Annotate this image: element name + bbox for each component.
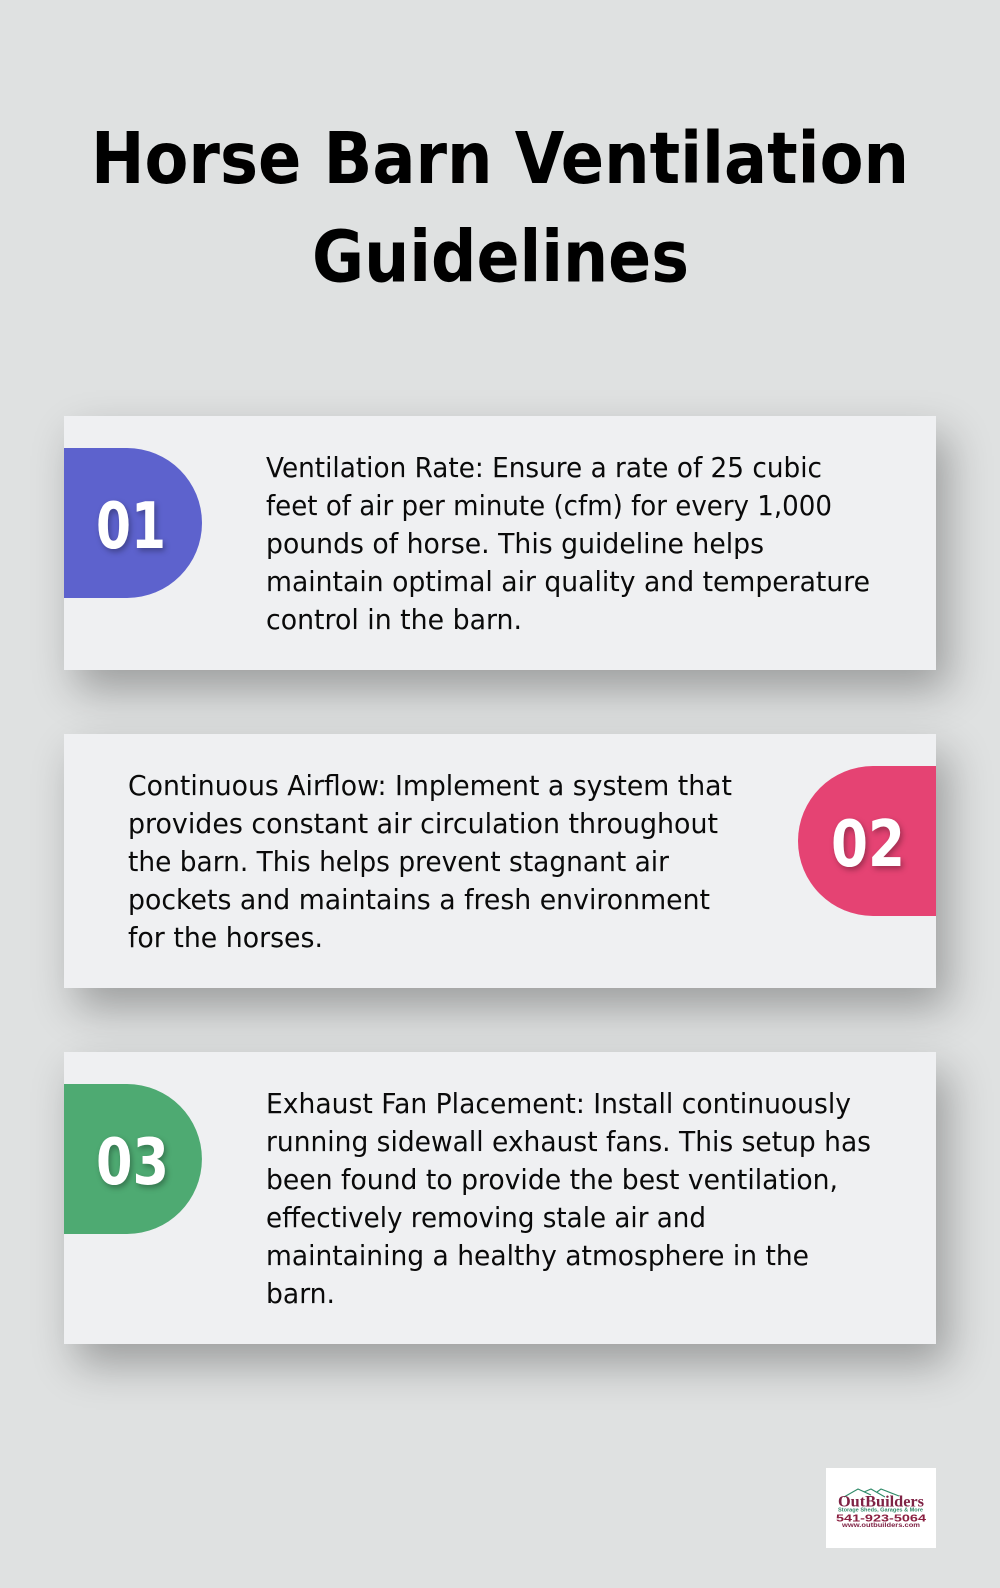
badge: 01: 01 bbox=[96, 490, 166, 564]
text: exhaust fan placement: been found to provide the best ventilation, bbox=[266, 1164, 838, 1196]
text: continuous airflow: pockets and maintains a fresh environment bbox=[128, 884, 710, 916]
text: exhaust fan placement: running sidewall exhaust fans. This setup has bbox=[266, 1126, 871, 1158]
logo text: Storage Sheds, Garages & More bbox=[838, 1508, 923, 1514]
title: Horse Barn Ventilation bbox=[91, 117, 909, 200]
text: exhaust fan placement: effectively removing stale air and bbox=[266, 1202, 706, 1234]
logo text: www.outbuilders.com bbox=[841, 1522, 920, 1529]
text: ventilation rate: Ventilation Rate: Ensure a rate of 25 cubic bbox=[266, 452, 822, 484]
text: continuous airflow: the barn. This helps prevent stagnant air bbox=[128, 846, 670, 878]
text: exhaust fan placement: Exhaust Fan Placement: Install continuously bbox=[266, 1088, 851, 1120]
badge: 03: 03 bbox=[96, 1126, 169, 1200]
text: continuous airflow: for the horses. bbox=[128, 922, 323, 954]
badge: 03 bbox=[64, 1084, 202, 1234]
text: ventilation rate: feet of air per minute (cfm) for every 1,000 bbox=[266, 490, 832, 522]
text: ventilation rate: maintain optimal air quality and temperature bbox=[266, 566, 870, 598]
logo text bbox=[836, 1494, 927, 1529]
logo text: 541-923-5064 bbox=[836, 1514, 927, 1524]
badge: 01 bbox=[64, 448, 202, 598]
text: ventilation rate: pounds of horse. This guideline helps bbox=[266, 528, 764, 560]
text: exhaust fan placement: maintaining a healthy atmosphere in the bbox=[266, 1240, 809, 1272]
title: Guidelines bbox=[312, 216, 689, 298]
text: ventilation rate bbox=[266, 452, 870, 636]
icon: roof lines bbox=[844, 1489, 899, 1497]
text: continuous airflow bbox=[128, 770, 732, 954]
panel: step 01 ventilation rate bbox=[64, 416, 936, 670]
logo: OutBuilders bbox=[826, 1468, 936, 1548]
text: exhaust fan placement: barn. bbox=[266, 1278, 335, 1310]
text: ventilation rate: control in the barn. bbox=[266, 604, 522, 636]
text: continuous airflow: Continuous Airflow: Implement a system that bbox=[128, 770, 732, 802]
panel: step 03 exhaust fan placement bbox=[64, 1052, 936, 1344]
text: continuous airflow: provides constant air circulation throughout bbox=[128, 808, 718, 840]
text: exhaust fan placement bbox=[266, 1088, 871, 1310]
panel: step 02 continuous airflow bbox=[64, 734, 936, 988]
badge: 02 bbox=[798, 766, 936, 916]
logo text: OutBuilders bbox=[838, 1494, 924, 1510]
badge: 02: 02 bbox=[831, 808, 905, 882]
title bbox=[91, 117, 909, 298]
